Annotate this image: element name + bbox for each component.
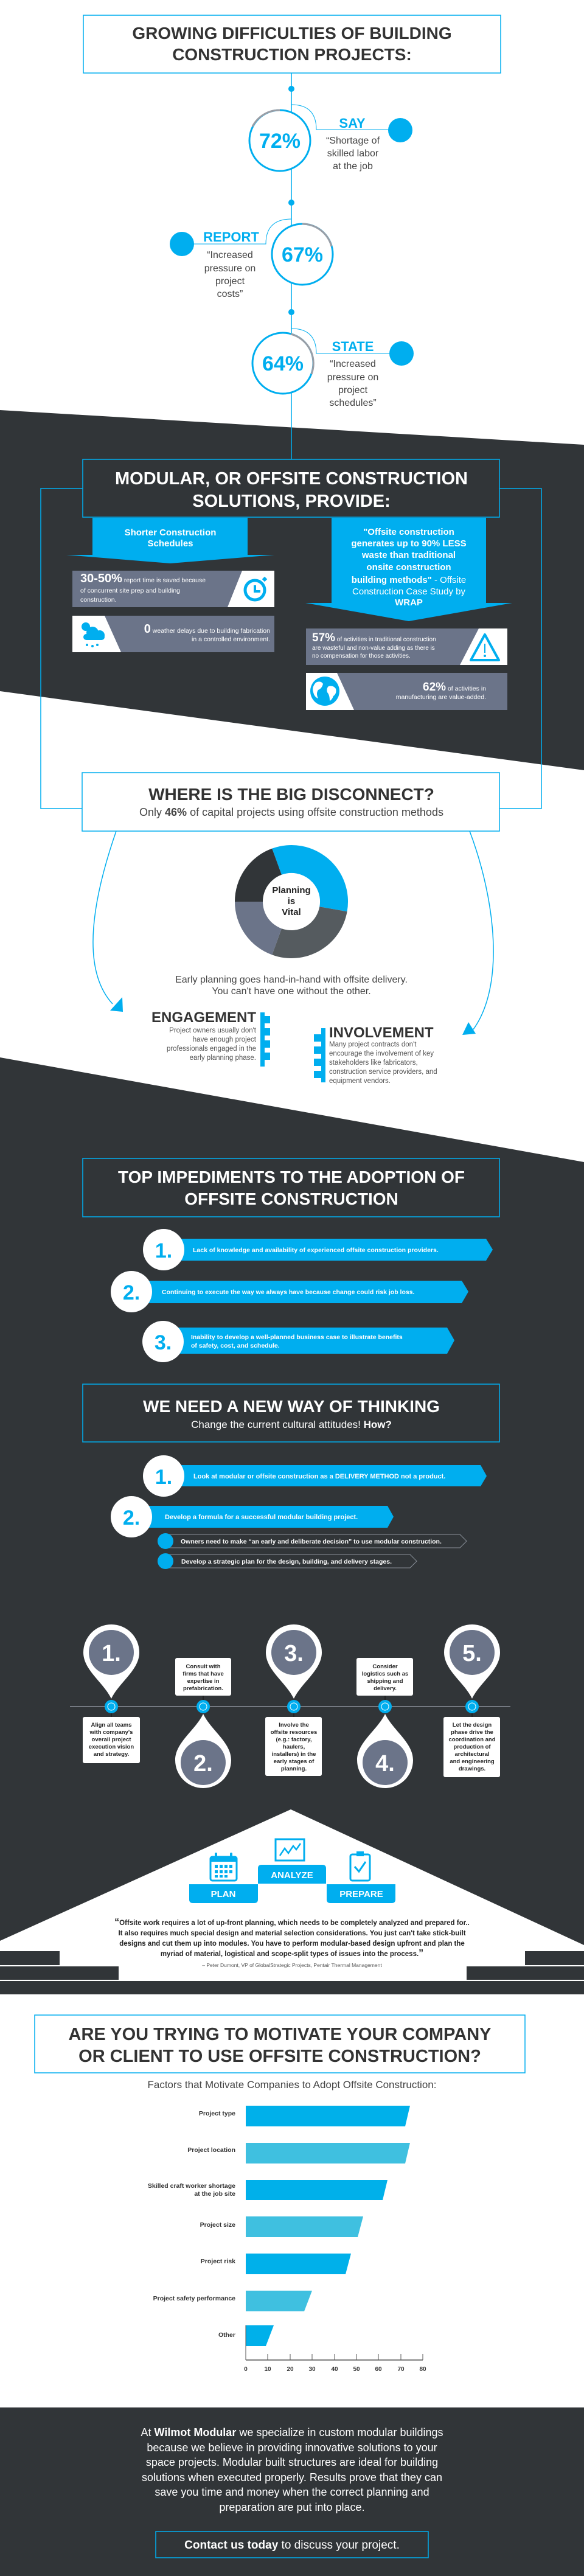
bar chart: motivating factors: Project type — [199, 2110, 235, 2117]
timeline line — [70, 1706, 510, 1707]
pin 5: coordination and — [448, 1736, 496, 1743]
card: 62% value-added — [306, 673, 507, 710]
quote: Peter Dumont: designs and cut them up into modules. You have to perform modular-based design upfront and plan the — [119, 1940, 465, 1948]
impediment 3: of safety, cost, and schedule. — [191, 1342, 280, 1349]
heading: motivate — [35, 2015, 525, 2073]
contact button — [156, 2532, 428, 2558]
bar chart: motivating factors: Skilled craft worker shortage — [148, 2182, 235, 2190]
chart subtitle: Factors that Motivate Companies to Adopt Offsite Construction: — [148, 2079, 436, 2090]
heading: modular solutions: SOLUTIONS, PROVIDE: — [192, 492, 391, 511]
arrow: shorter construction schedules: Schedules — [147, 538, 193, 549]
icon: involvement bracket — [314, 1028, 325, 1082]
stat: 67% report: 67% — [282, 243, 323, 266]
card: 30-50% time saved — [72, 571, 274, 607]
pin 2 — [175, 1658, 231, 1788]
label: plan analyze prepare: PREPARE — [339, 1889, 383, 1899]
bar chart: motivating factors: Project location — [187, 2146, 235, 2154]
bar chart: motivating factors: Project risk — [201, 2258, 235, 2265]
pin 1 — [83, 1624, 140, 1763]
pin 4 — [356, 1658, 413, 1788]
involvement block: Many project contracts don't — [329, 1041, 417, 1048]
heading: motivate: ARE YOU TRYING TO MOTIVATE YOUR COMPANY — [69, 2025, 491, 2044]
footer text: space projects. Modular built structures are ideal for building — [146, 2456, 438, 2468]
step 1: delivery method — [143, 1455, 487, 1497]
stat: 64% state: STATE — [332, 339, 374, 354]
card: 57% wasteful: 57% of activities in traditional construction — [312, 632, 436, 644]
pin 5: Let the design — [453, 1722, 492, 1728]
stat: 67% report: REPORT — [203, 229, 259, 245]
arrow: shorter construction schedules — [66, 518, 274, 563]
icon: engagement bracket — [260, 1012, 270, 1067]
impediment 2: Continuing to execute the way we always have because change could risk job loss. — [162, 1289, 415, 1296]
bar chart: motivating factors — [148, 2106, 426, 2373]
caption: early planning: Early planning goes hand-in-hand with offsite delivery. — [175, 975, 408, 985]
arrow: 90% less waste quote: generates up to 90% LESS — [351, 538, 467, 549]
icon: stopwatch — [245, 577, 267, 600]
stat: 64% state: 64% — [262, 352, 304, 375]
involvement block: INVOLVEMENT — [329, 1025, 434, 1041]
card: 57% wasteful: are wasteful and non-value adding as there is — [312, 645, 435, 652]
engagement block: professionals engaged in the — [167, 1045, 256, 1053]
pin 5: production of — [453, 1744, 491, 1750]
impediment 2 — [111, 1271, 468, 1312]
stat: 72% say — [249, 86, 412, 172]
bar chart: motivating factors: at the job site — [194, 2190, 235, 2198]
pin 3: Involve the — [279, 1722, 309, 1728]
pin 4: 4. — [375, 1751, 395, 1777]
quote: Peter Dumont: It also requires much special design and material selection considerations. You just can't take stick-built — [118, 1930, 466, 1937]
stat: 72% say: “Shortage of — [326, 136, 380, 146]
impediment 1 — [143, 1229, 493, 1270]
involvement block: stakeholders like fabricators, — [329, 1059, 418, 1067]
stat: 72% say: 72% — [259, 130, 301, 153]
chart: planning ring: is — [288, 896, 295, 907]
sub-point: owners decision — [158, 1533, 467, 1549]
card: 0 weather delays: in a controlled environment. — [192, 636, 270, 643]
arrow: 90% less waste quote: onsite construction — [366, 562, 451, 573]
pin 3: planning. — [281, 1766, 307, 1772]
pin 4: Consider — [372, 1663, 398, 1670]
arrow: 90% less waste quote: building methods" - Offsite — [352, 575, 466, 585]
engagement block: ENGAGEMENT — [151, 1009, 256, 1026]
stat: 64% state — [252, 309, 414, 408]
icon: globe — [310, 677, 339, 706]
heading: modular solutions — [83, 459, 499, 517]
stat: 67% report: pressure on — [204, 263, 255, 274]
sub-point: strategic plan: Develop a strategic plan for the design, building, and delivery stages. — [181, 1558, 392, 1565]
pin 3: offsite resources — [271, 1729, 317, 1736]
icon: chart — [276, 1839, 304, 1861]
bar chart: motivating factors: 80 — [419, 2366, 426, 2373]
heading: big disconnect: Only 46% of capital projects using offsite construction methods — [139, 806, 443, 818]
pin 1: Align all teams — [91, 1722, 132, 1728]
stat: 72% say: at the job — [333, 161, 373, 172]
pin 5: architectural — [454, 1751, 490, 1758]
impediment 2: 2. — [123, 1281, 140, 1304]
card: 30-50% time saved: construction. — [80, 596, 117, 604]
stat: 72% say: SAY — [339, 116, 366, 131]
title: growing difficulties — [83, 15, 501, 73]
sub-point: strategic plan — [158, 1553, 417, 1569]
involvement block: equipment vendors. — [329, 1077, 391, 1085]
involvement block: encourage the involvement of key — [329, 1050, 434, 1057]
pin 1: execution vision — [89, 1744, 134, 1750]
title: growing difficulties: GROWING DIFFICULTIES OF BUILDING — [132, 24, 452, 43]
pin 3: installers) in the — [272, 1751, 316, 1758]
background band 2 — [0, 1057, 584, 1994]
quote: Peter Dumont: – Peter Dumont, VP of GlobalStrategic Projects, Pentair Thermal Management — [202, 1962, 382, 1968]
arrow: shorter construction schedules: Shorter Construction — [125, 527, 216, 538]
card: 57% wasteful — [306, 628, 507, 665]
heading: new way of thinking: WE NEED A NEW WAY OF THINKING — [143, 1397, 440, 1416]
bar chart: motivating factors: 60 — [375, 2366, 382, 2373]
engagement block — [151, 1009, 270, 1067]
footer text: preparation are put into place. — [219, 2501, 365, 2513]
arrow: 90% less waste quote — [305, 518, 512, 621]
bar chart: motivating factors: 40 — [331, 2366, 338, 2373]
pin 2: prefabrication. — [183, 1685, 223, 1692]
step 1: delivery method: Look at modular or offsite construction as a DELIVERY METHOD not a product. — [193, 1473, 445, 1480]
caption: early planning: You can't have one without the other. — [212, 986, 371, 997]
step 2: formula — [111, 1496, 394, 1537]
quote: Peter Dumont: myriad of material, logistical and scope-split types of issues into the process.” — [161, 1948, 423, 1958]
pin 3: (e.g.: factory, — [276, 1736, 311, 1743]
impediment 1: Lack of knowledge and availability of experienced offsite construction providers. — [193, 1247, 439, 1254]
sub-point: owners decision: Owners need to make “an early and deliberate decision” to use modular construction. — [181, 1538, 442, 1545]
stat: 67% report: project — [215, 276, 245, 287]
pin 5: 5. — [462, 1641, 482, 1666]
card: 0 weather delays — [72, 616, 274, 652]
engagement block: have enough project — [193, 1036, 257, 1043]
stat: 64% state: schedules” — [329, 398, 377, 408]
quote: Peter Dumont — [114, 1917, 470, 1968]
bar chart: motivating factors: Project safety performance — [153, 2295, 235, 2302]
stat: 67% report: costs” — [217, 289, 243, 299]
label: plan analyze prepare: PLAN — [211, 1889, 235, 1899]
involvement block: construction service providers, and — [329, 1068, 437, 1076]
label: plan analyze prepare: ANALYZE — [271, 1870, 313, 1881]
heading: top impediments: TOP IMPEDIMENTS TO THE ADOPTION OF — [118, 1168, 465, 1186]
arrow: right curved — [462, 831, 493, 1035]
stat: 67% report — [170, 200, 333, 299]
footer background — [0, 2407, 584, 2576]
pin 3: early stages of — [274, 1758, 315, 1765]
stat: 64% state: project — [338, 385, 368, 395]
impediment 3 — [142, 1321, 454, 1362]
step 2: formula: Develop a formula for a successful modular building project. — [165, 1514, 358, 1521]
pin 2: expertise in — [187, 1678, 220, 1685]
engagement block: early planning phase. — [190, 1054, 256, 1062]
arrow: 90% less waste quote: "Offsite construction — [363, 527, 454, 537]
card: 62% value-added: manufacturing are value-added. — [396, 694, 486, 701]
title: growing difficulties: CONSTRUCTION PROJECTS: — [172, 45, 412, 64]
chart: planning ring: Vital — [282, 907, 301, 917]
footer text: save you time and money when the correct planning and — [155, 2486, 429, 2498]
heading: motivate: OR CLIENT TO USE OFFSITE CONSTRUCTION? — [78, 2047, 481, 2066]
chart: planning ring: Planning — [272, 885, 311, 896]
label: plan analyze prepare — [189, 1865, 395, 1903]
pin 2: 2. — [193, 1751, 213, 1777]
icon: clipboard — [350, 1851, 370, 1881]
pin 1: overall project — [92, 1736, 131, 1743]
card: 30-50% time saved: 30-50% report time is saved because — [80, 572, 206, 585]
card: 30-50% time saved: of concurrent site prep and building — [80, 587, 180, 594]
heading: modular solutions: MODULAR, OR OFFSITE CONSTRUCTION — [115, 469, 468, 489]
pin 4: logistics such as — [362, 1671, 408, 1677]
bar chart: motivating factors: 20 — [287, 2366, 294, 2373]
bar chart: motivating factors: Other — [218, 2331, 235, 2339]
vertical timeline line — [291, 73, 292, 459]
stat: 64% state: “Increased — [330, 359, 376, 369]
impediment 3: 3. — [155, 1331, 172, 1354]
pin 4: delivery. — [374, 1685, 397, 1692]
pin 3: 3. — [284, 1641, 304, 1666]
bar chart: motivating factors: 0 — [244, 2366, 248, 2373]
impediment 3: Inability to develop a well-planned business case to illustrate benefits — [191, 1334, 403, 1341]
card: 62% value-added: 62% of activities in — [423, 681, 486, 694]
heading: new way of thinking: Change the current cultural attitudes! How? — [191, 1419, 392, 1430]
engagement block: Project owners usually don't — [169, 1027, 257, 1034]
pin 5: phase drive the — [451, 1729, 493, 1736]
icon: warning triangle — [471, 635, 499, 660]
bar chart: motivating factors: 50 — [353, 2366, 360, 2373]
card: 0 weather delays: 0 weather delays due to building fabrication — [144, 622, 270, 636]
heading: new way of thinking — [83, 1384, 499, 1442]
bracket lines — [41, 489, 541, 809]
background band 1 — [0, 410, 584, 770]
pin 1: with company's — [89, 1729, 133, 1736]
quote: Peter Dumont: “Offsite work requires a lot of up-front planning, which needs to be completely analyzed and prepared for.. — [114, 1917, 470, 1927]
stat: 72% say: skilled labor — [327, 148, 379, 159]
pin 1: and strategy. — [94, 1751, 129, 1758]
pin 4: shipping and — [367, 1678, 403, 1685]
bar chart: motivating factors: 10 — [264, 2366, 271, 2373]
icon: calendar — [210, 1853, 237, 1881]
pin 3: haulers, — [283, 1744, 305, 1750]
step 1: delivery method: 1. — [155, 1466, 172, 1489]
caption: early planning — [175, 975, 408, 997]
pin 5: drawings. — [459, 1766, 485, 1772]
footer text: At Wilmot Modular we specialize in custom modular buildings — [141, 2426, 443, 2438]
icon: weather cloud — [82, 622, 105, 647]
stat: 64% state: pressure on — [327, 372, 378, 383]
footer text: because we believe in providing innovative solutions to your — [147, 2442, 437, 2454]
pin 5: and engineering — [450, 1758, 495, 1765]
arrow: left curved — [93, 831, 123, 1012]
heading: top impediments — [83, 1158, 499, 1217]
pin 3 — [265, 1624, 322, 1776]
pin 2: Consult with — [186, 1663, 221, 1670]
impediment 1: 1. — [155, 1239, 172, 1262]
step 2: formula: 2. — [123, 1506, 140, 1530]
contact button: Contact us today to discuss your project. — [184, 2539, 400, 2552]
arrow: 90% less waste quote: Construction Case Study by — [352, 587, 465, 597]
pin 5 — [443, 1624, 500, 1777]
involvement block — [314, 1025, 437, 1085]
heading: big disconnect — [82, 773, 499, 831]
heading: big disconnect: WHERE IS THE BIG DISCONNECT? — [148, 785, 434, 804]
chart: planning ring — [235, 845, 348, 958]
bar chart: motivating factors: Project size — [200, 2221, 235, 2229]
arrow: 90% less waste quote: WRAP — [395, 597, 423, 608]
stat: 67% report: “Increased — [207, 250, 253, 260]
heading: top impediments: OFFSITE CONSTRUCTION — [184, 1189, 398, 1208]
card: 57% wasteful: no compensation for those activities. — [312, 653, 411, 660]
pin 1: 1. — [102, 1641, 121, 1666]
arrow: 90% less waste quote: waste than traditional — [361, 550, 456, 560]
bar chart: motivating factors: 70 — [397, 2366, 405, 2373]
pin 2: firms that have — [182, 1671, 224, 1677]
house shape — [0, 1809, 584, 1994]
bar chart: motivating factors: 30 — [308, 2366, 316, 2373]
footer text: solutions when executed properly. Results prove that they can — [142, 2471, 442, 2484]
footer text — [141, 2426, 443, 2513]
